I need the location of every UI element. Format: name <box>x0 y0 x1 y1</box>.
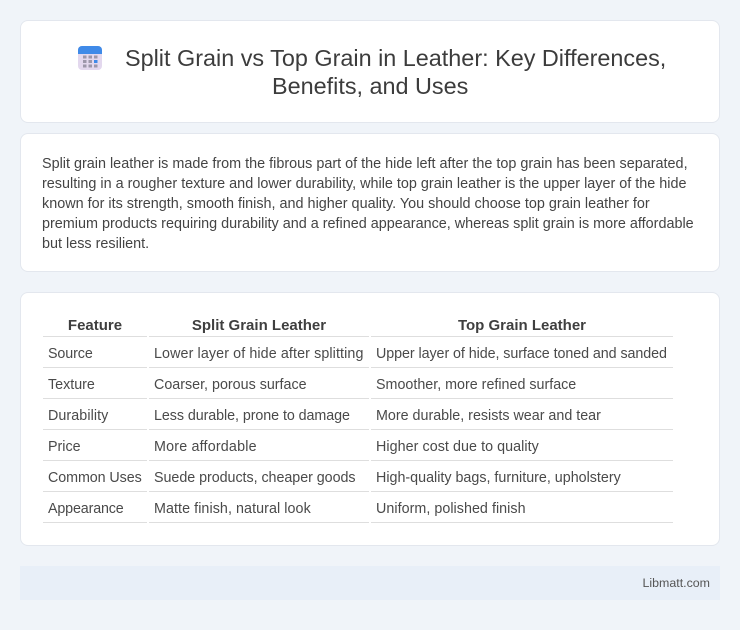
table header <box>68 317 586 334</box>
panel: summary <box>20 133 720 272</box>
table rows: Source <box>48 346 93 362</box>
table rows: Suede products, cheaper goods <box>154 470 356 486</box>
panel: comparison table <box>20 292 720 546</box>
text block: summary paragraph: premium products requiring durability and a refined appearance, whereas split grain is more affordable <box>42 216 694 232</box>
table rows: Durability <box>48 408 108 424</box>
table rows: Price <box>48 439 81 455</box>
table rows <box>43 336 673 523</box>
table rows: Uniform, polished finish <box>376 501 526 517</box>
table rows: Appearance <box>48 501 124 517</box>
table header: Top Grain Leather <box>458 317 586 334</box>
panel: title card <box>20 20 720 123</box>
text block: summary paragraph: but less resilient. <box>42 236 149 252</box>
table rows: Matte finish, natural look <box>154 501 311 517</box>
table rows: Coarser, porous surface <box>154 377 307 393</box>
icon: calendar <box>78 46 102 70</box>
title: Split Grain vs Top Grain in Leather: Key Differences, <box>125 45 666 71</box>
text block: summary paragraph: known for its strength, smooth finish, and higher quality. You should choose top grain leather for <box>42 196 650 212</box>
text block: summary paragraph <box>42 156 694 252</box>
table rows: Higher cost due to quality <box>376 439 539 455</box>
table rows: High-quality bags, furniture, upholstery <box>376 470 621 486</box>
table rows: Less durable, prone to damage <box>154 408 350 424</box>
table rows: More affordable <box>154 439 257 455</box>
table header: Feature <box>68 317 122 334</box>
table rows: More durable, resists wear and tear <box>376 408 601 424</box>
text block: summary paragraph: Split grain leather is made from the fibrous part of the hide left after the top grain has been separated, <box>42 156 688 172</box>
table rows: Common Uses <box>48 470 142 486</box>
text block: summary paragraph: resulting in a rougher texture and lower durability, while top grain leather is the upper layer of the hide <box>42 176 686 192</box>
title <box>125 45 666 99</box>
footer bar <box>20 566 720 600</box>
table rows: Texture <box>48 377 95 393</box>
footer text: Libmatt.com <box>643 576 710 590</box>
table header: Split Grain Leather <box>192 317 326 334</box>
title: Benefits, and Uses <box>272 73 468 99</box>
table rows: Upper layer of hide, surface toned and sanded <box>376 346 667 362</box>
table rows: Lower layer of hide after splitting <box>154 346 364 362</box>
table rows: Smoother, more refined surface <box>376 377 576 393</box>
